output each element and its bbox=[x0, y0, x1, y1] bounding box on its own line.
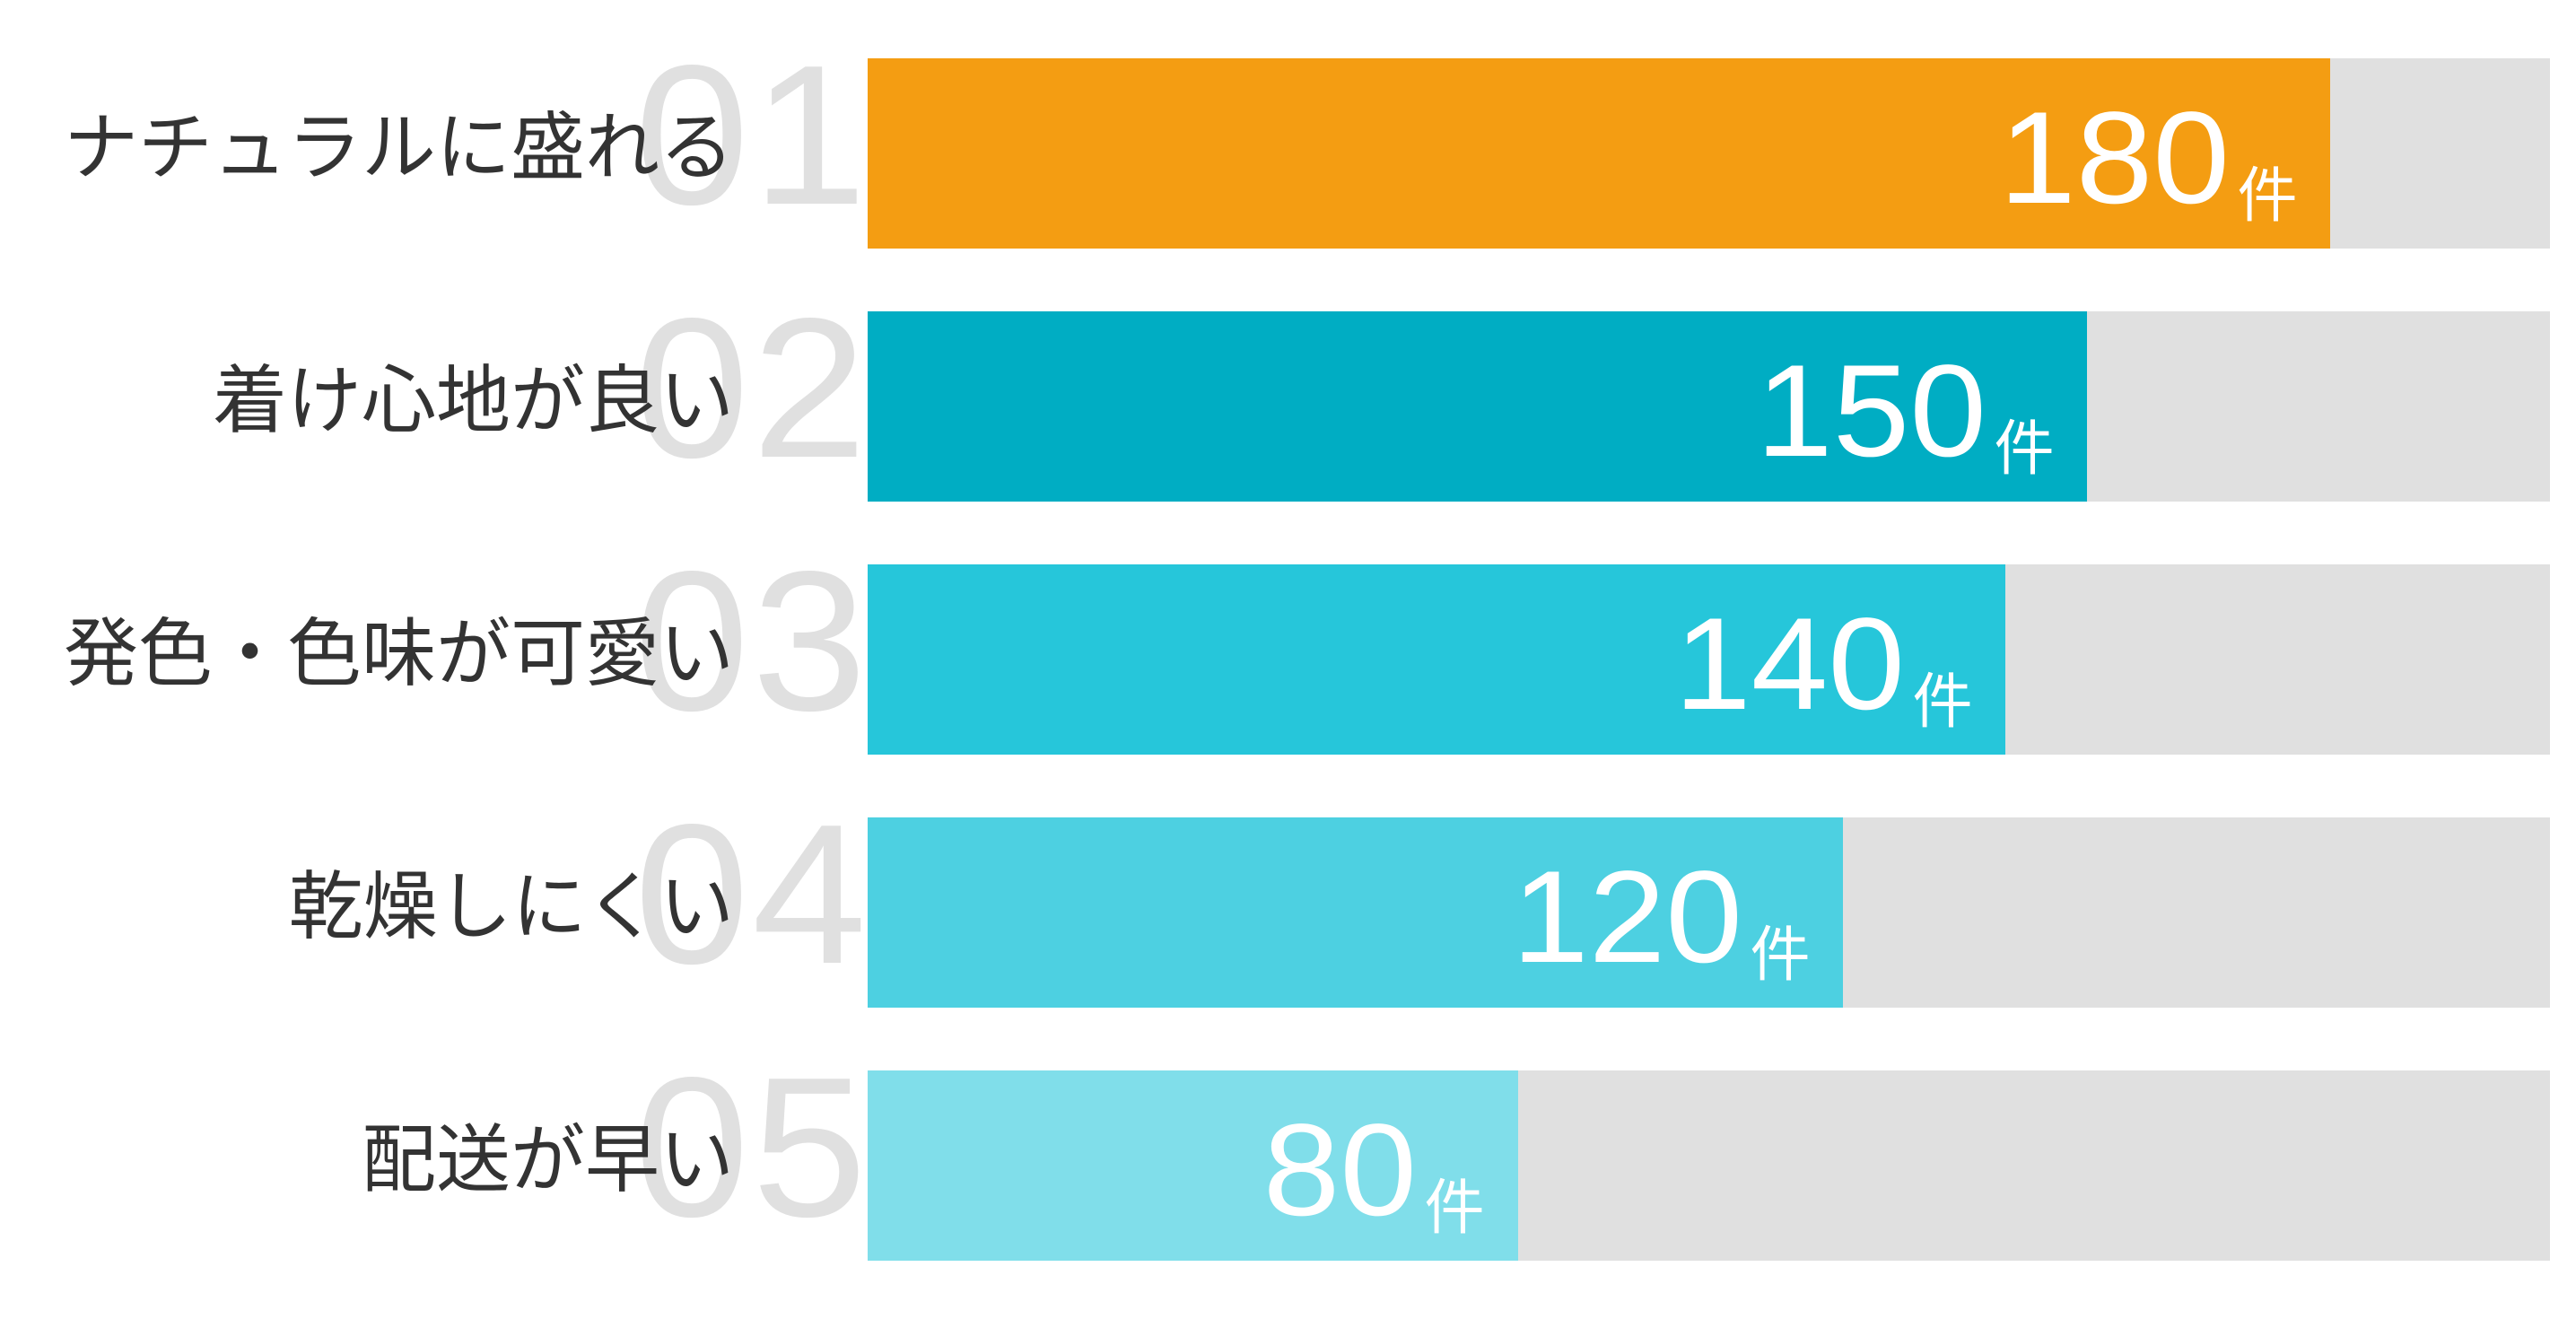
bar fill bbox=[868, 311, 2087, 502]
row label: ナチュラルに盛れる bbox=[64, 106, 734, 189]
row label: 発色・色味が可愛い bbox=[64, 612, 734, 695]
rank number 05: 05 bbox=[634, 1035, 869, 1258]
row label: 着け心地が良い bbox=[213, 359, 734, 442]
row label: 乾燥しにくい bbox=[289, 865, 734, 948]
bar track bbox=[868, 311, 2550, 502]
unit: 件 bbox=[1913, 653, 1972, 740]
unit: 件 bbox=[1994, 400, 2055, 487]
bar fill bbox=[868, 1070, 1518, 1261]
bar fill bbox=[868, 817, 1843, 1008]
rank number 04: 04 bbox=[634, 782, 869, 1005]
bar fill bbox=[868, 58, 2330, 249]
unit: 件 bbox=[2238, 147, 2297, 234]
unit: 件 bbox=[1425, 1159, 1484, 1246]
value 80: 80 bbox=[1263, 1096, 1417, 1243]
value 140: 140 bbox=[1674, 590, 1905, 737]
value 120: 120 bbox=[1512, 843, 1742, 990]
row 3: 発色・色味が可愛い bbox=[64, 529, 2550, 755]
row 2: 着け心地が良い bbox=[213, 276, 2550, 502]
rank number 02: 02 bbox=[634, 276, 869, 499]
unit: 件 bbox=[1750, 906, 1811, 993]
rank number 03: 03 bbox=[634, 529, 869, 752]
bar track bbox=[868, 564, 2550, 755]
row 4: 乾燥しにくい bbox=[289, 782, 2550, 1008]
value 180: 180 bbox=[1999, 84, 2230, 231]
bar track bbox=[868, 817, 2550, 1008]
rank number 01: 01 bbox=[634, 23, 869, 246]
bar track bbox=[868, 1070, 2550, 1261]
value 150: 150 bbox=[1756, 337, 1987, 484]
row 5: 配送が早い bbox=[362, 1035, 2550, 1261]
bar track bbox=[868, 58, 2550, 249]
row 1: ナチュラルに盛れる bbox=[64, 23, 2550, 249]
bar fill bbox=[868, 564, 2005, 755]
row label: 配送が早い bbox=[362, 1118, 734, 1201]
